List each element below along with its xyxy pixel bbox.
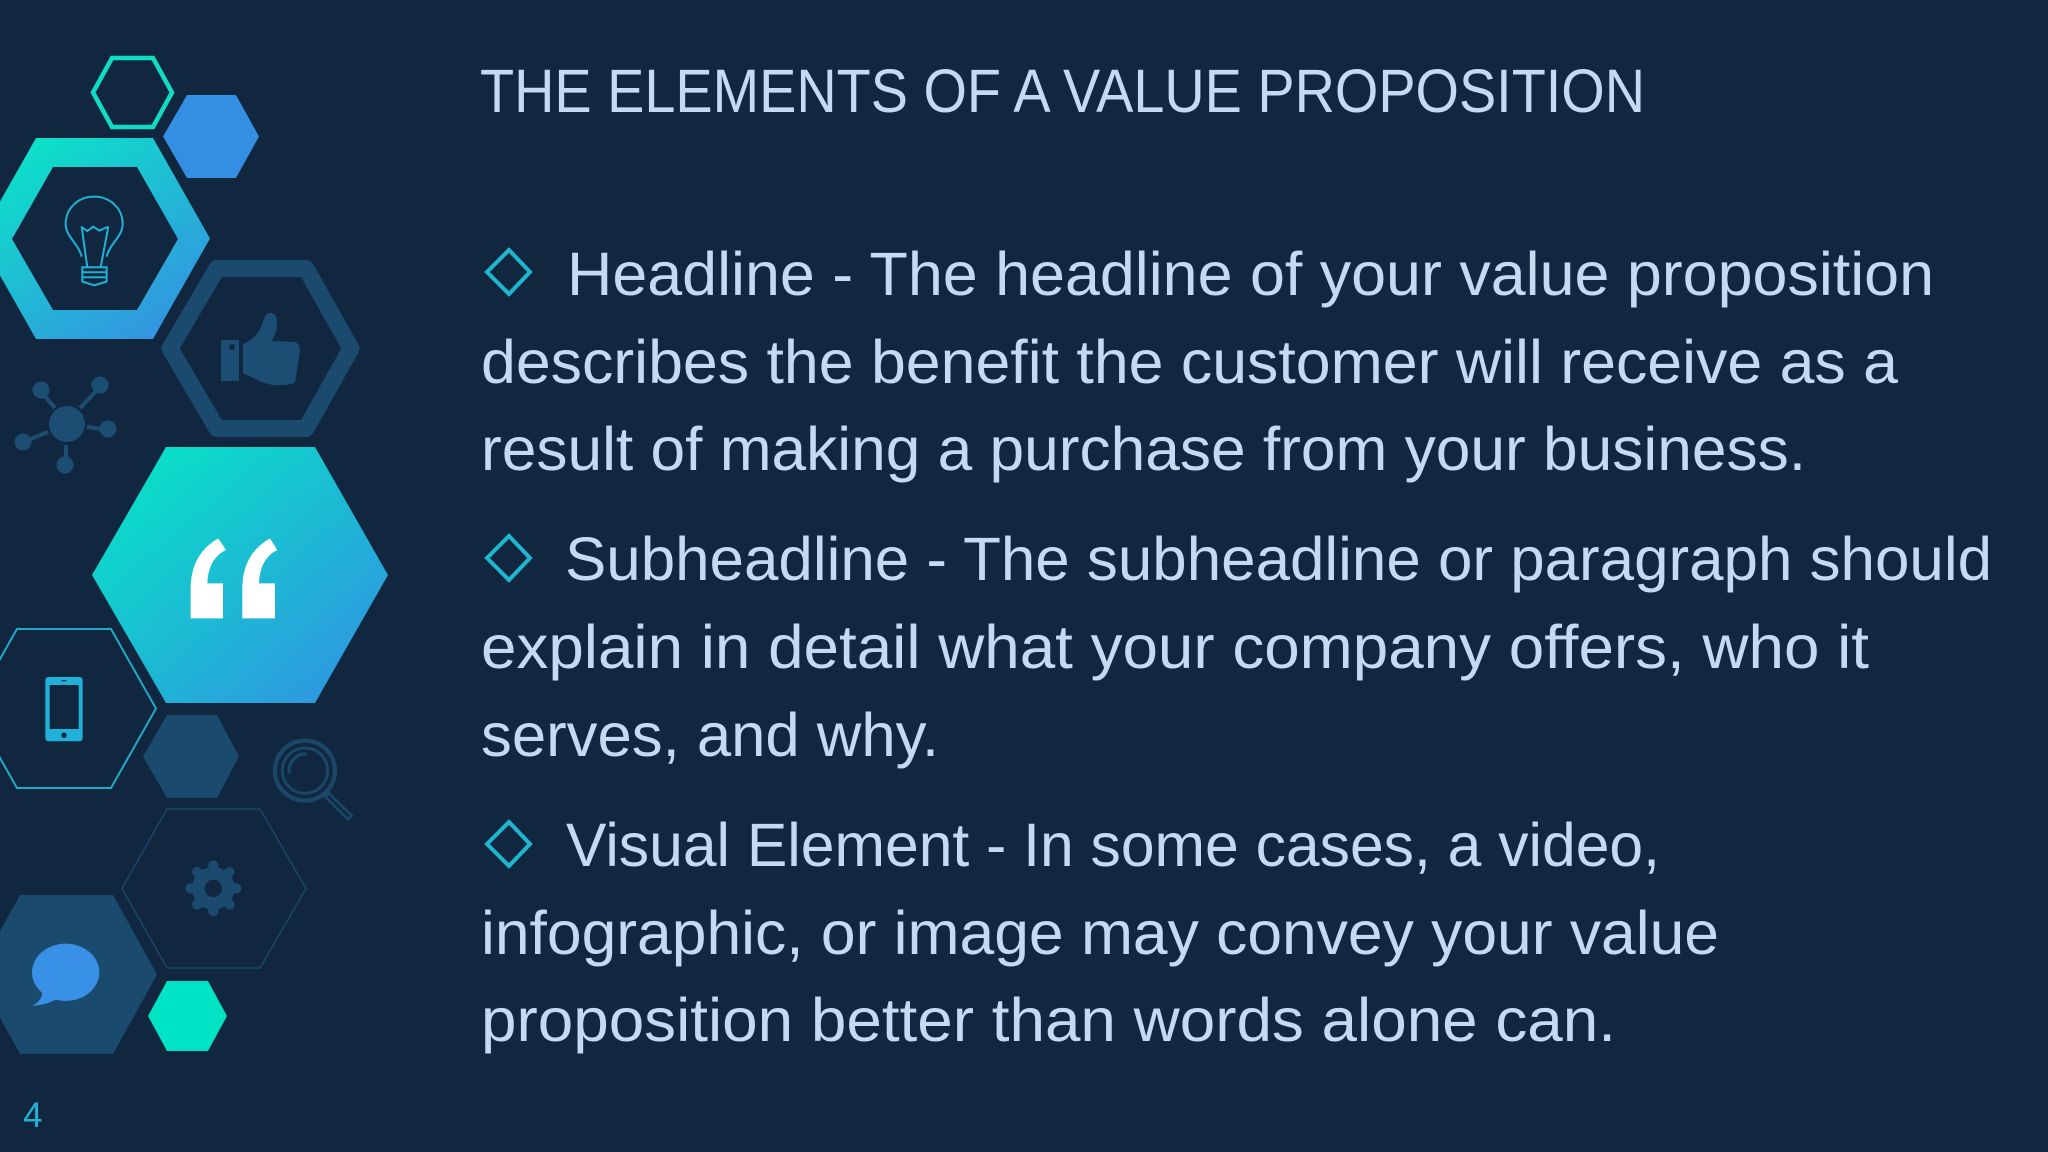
panel: hexagon icon cluster [0,58,388,1054]
paragraph: subheadline: Subheadline - The subheadline or paragraph should [565,525,1992,593]
paragraph: visual element [481,811,1719,1054]
icon: gear [190,865,236,911]
bullet: diamond [487,536,530,580]
bullet: diamond [487,822,530,866]
icon: network nodes [14,376,116,474]
paragraph: subheadline: explain in detail what your company offers, who it [481,613,1869,681]
icon: smartphone [45,677,83,741]
title: THE ELEMENTS OF A VALUE PROPOSITION [480,57,1645,125]
gear outline hexagon [122,809,306,968]
phone outline hexagon [0,629,156,788]
paragraph: headline: result of making a purchase from your business. [481,415,1806,483]
solid dark hexagon [143,715,239,798]
chat hexagon [0,895,157,1054]
paragraph: subheadline [481,525,1992,769]
icon: magnifying glass [275,741,351,818]
paragraph: subheadline: serves, and why. [481,701,939,769]
paragraph: visual element: infographic, or image may convey your value [481,899,1719,967]
outline teal hexagon [93,58,172,127]
paragraph: visual element: proposition better than words alone can. [481,986,1616,1054]
icon: thumbs up [221,313,300,385]
gradient ring hexagon with light bulb [0,138,210,339]
large gradient hexagon with quotation mark [92,447,388,703]
page number: 4 [23,1096,42,1135]
solid blue hexagon [163,95,259,178]
solid teal hexagon [148,981,227,1051]
thumbs-up hexagon [170,268,351,428]
icon: light bulb [66,197,123,285]
paragraph: headline: describes the benefit the customer will receive as a [481,328,1898,396]
icon: quotation mark [191,538,277,618]
paragraph: headline [481,240,1934,483]
bullet: diamond [487,250,530,294]
paragraph: headline: Headline - The headline of your value proposition [567,240,1934,308]
icon: speech bubble [32,944,99,1006]
paragraph: visual element: Visual Element - In some cases, a video, [566,811,1660,879]
